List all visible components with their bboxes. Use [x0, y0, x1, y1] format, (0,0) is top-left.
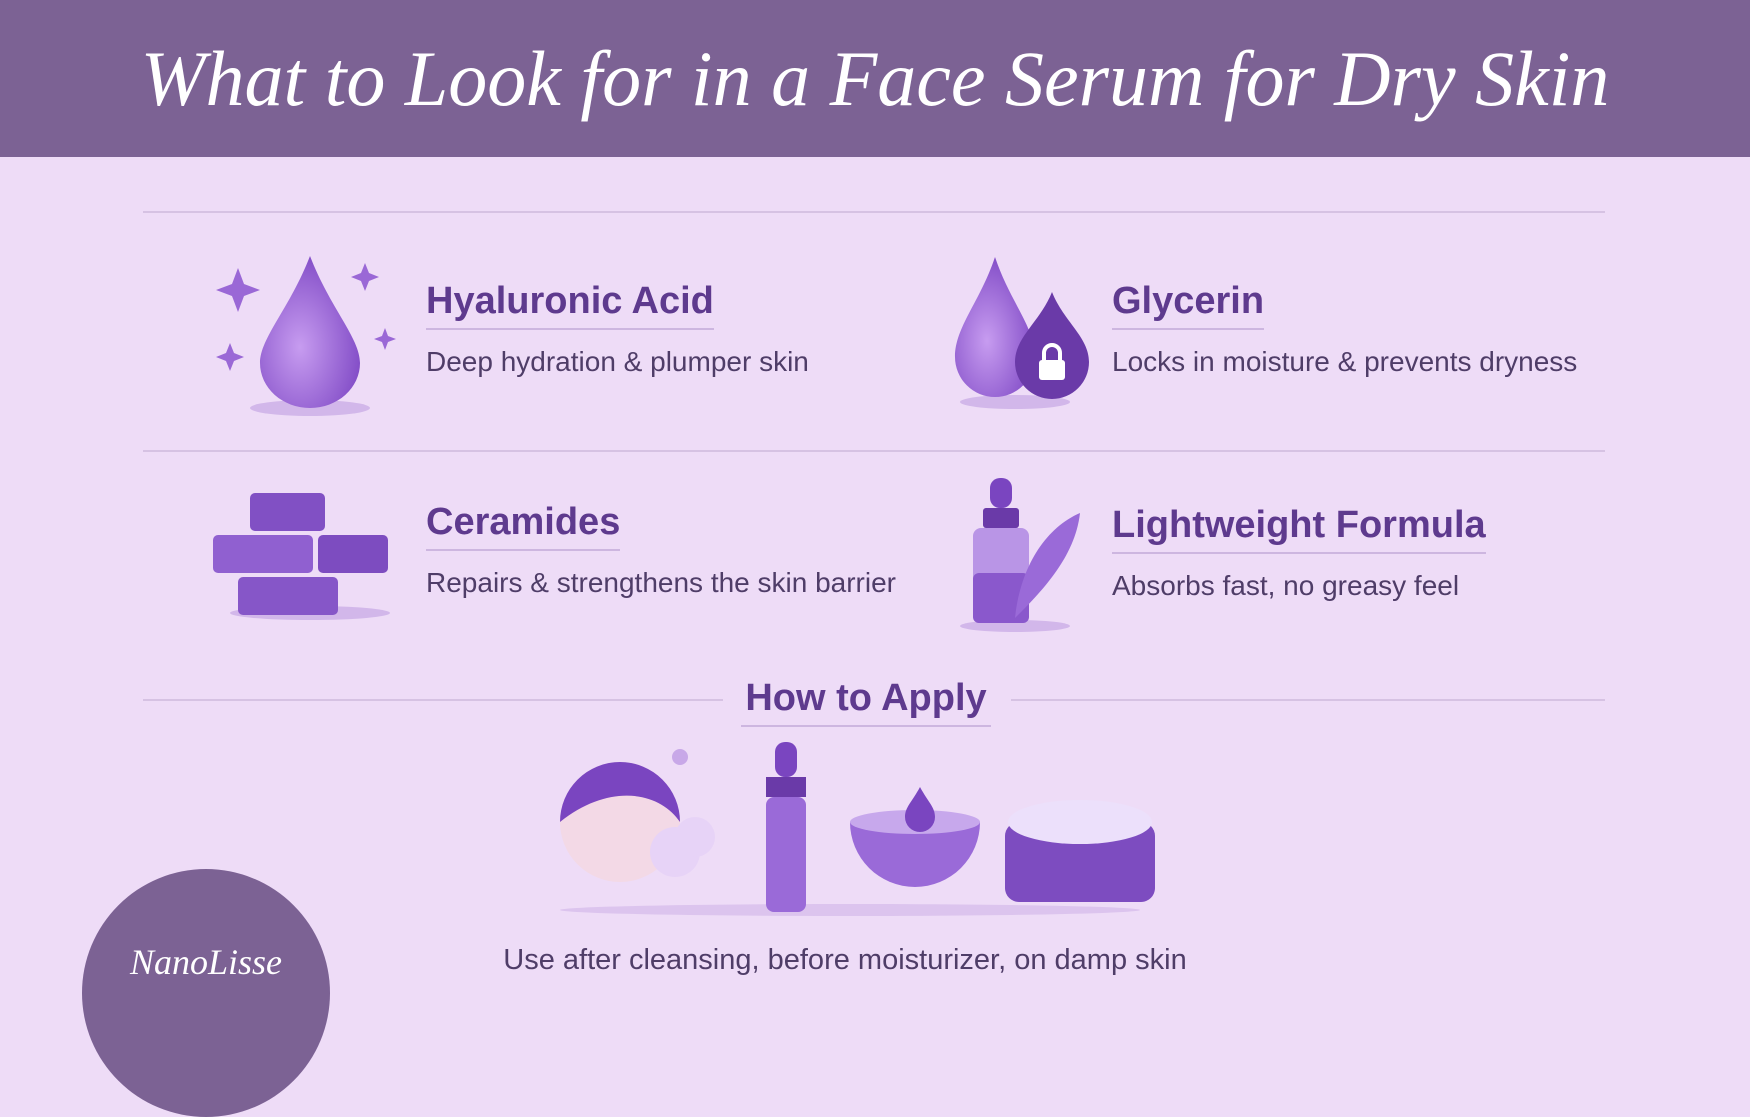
title: What to Look for in a Face Serum for Dry Skin	[141, 35, 1609, 122]
text: ceramides: Ceramides	[426, 501, 620, 543]
text: hyaluronic acid	[426, 280, 809, 377]
header band	[0, 0, 1750, 157]
text: lightweight formula: Absorbs fast, no greasy feel	[1112, 570, 1459, 601]
text: glycerin: Glycerin	[1112, 280, 1264, 322]
logo circle: NanoLisse	[130, 942, 282, 982]
text: lightweight formula: Lightweight Formula	[1112, 504, 1486, 546]
how to apply heading: How to Apply	[745, 677, 987, 719]
text: lightweight formula	[1112, 504, 1486, 601]
icon: ceramide bricks	[213, 493, 390, 620]
logo circle	[82, 869, 330, 1117]
icon: glycerin drops with lock	[954, 257, 1089, 409]
icon: sparkling drop	[216, 256, 396, 416]
text: ceramides: Repairs & strengthens the skin barrier	[426, 567, 896, 598]
text: hyaluronic acid: Deep hydration & plumper skin	[426, 346, 809, 377]
footer text: Use after cleansing, before moisturizer, on damp skin	[503, 944, 1187, 976]
text: glycerin	[1112, 280, 1577, 377]
icon: bottle with feather	[960, 478, 1080, 632]
text: ceramides	[426, 501, 896, 598]
text: glycerin: Locks in moisture & prevents dryness	[1112, 346, 1577, 377]
icons: application steps	[560, 742, 1155, 916]
text: hyaluronic acid: Hyaluronic Acid	[426, 280, 714, 322]
